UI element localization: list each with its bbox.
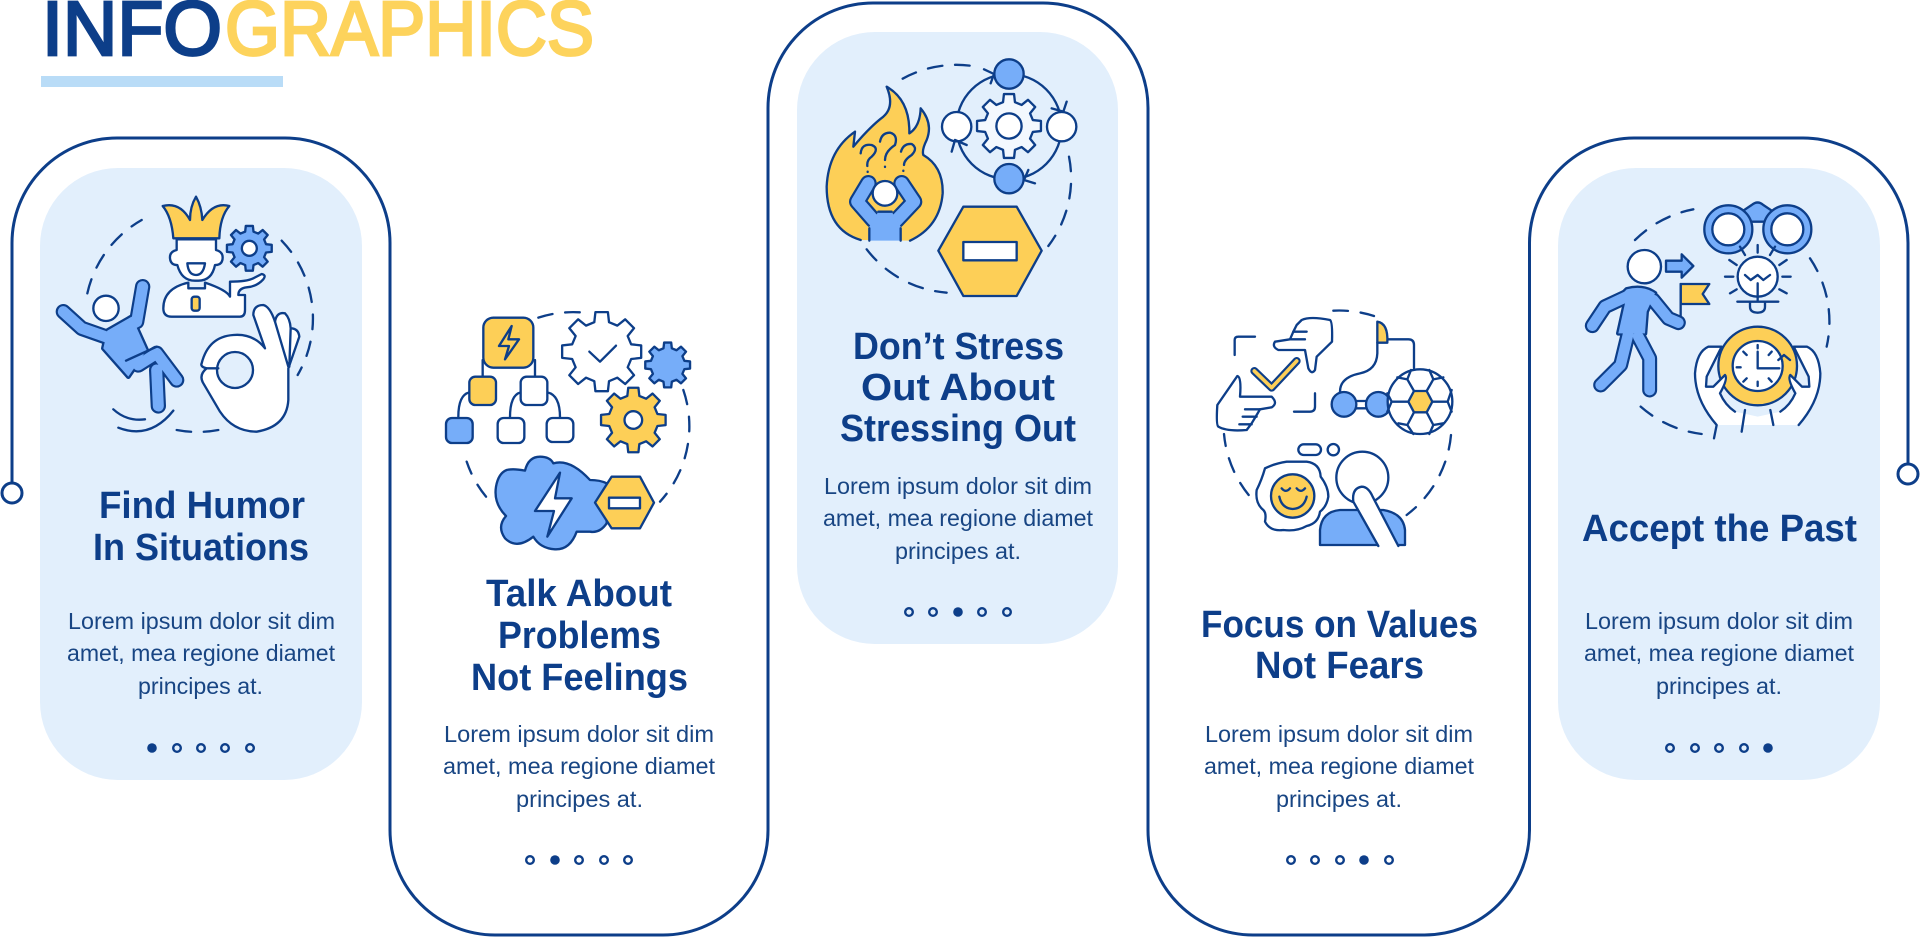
- panel 1 text: find humor: amet, mea regione diamet: [67, 640, 336, 666]
- panel 5 text: accept the past: principes at.: [1656, 673, 1782, 699]
- panel 5 text: accept the past: amet, mea regione diamet: [1584, 640, 1855, 666]
- panel 4 text: focus on values: Lorem ipsum dolor sit dim: [1205, 721, 1473, 747]
- panel 3 text: don't stress: amet, mea regione diamet: [823, 505, 1094, 531]
- panel 5 text: accept the past: Accept the Past: [1582, 508, 1857, 550]
- pager 1: [147, 743, 254, 753]
- panel 4 text: focus on values: amet, mea regione diamet: [1204, 753, 1475, 779]
- panel 5 text: accept the past: [1582, 508, 1857, 699]
- panel 3 text: don't stress: Out About: [861, 367, 1055, 409]
- panel 2 text: talk about problems: Not Feelings: [471, 657, 688, 699]
- panel 1 text: find humor: In Situations: [93, 527, 309, 569]
- title: [42, 0, 594, 72]
- panel 2 text: talk about problems: amet, mea regione diamet: [443, 753, 716, 779]
- pager 2: [526, 855, 632, 865]
- panel 3 text: don't stress: Lorem ipsum dolor sit dim: [824, 473, 1092, 499]
- panel 1 text: find humor: principes at.: [138, 673, 263, 699]
- title underline: [41, 76, 283, 87]
- pager 5: [1666, 743, 1773, 753]
- icon: stress: [827, 59, 1076, 296]
- panel 4 text: focus on values: [1201, 604, 1478, 812]
- panel 3 text: don't stress: principes at.: [895, 538, 1021, 564]
- pager 4: [1287, 855, 1393, 865]
- icon: past: [1592, 202, 1829, 438]
- panel 3 text: don't stress: [823, 326, 1094, 564]
- panel 4 text: focus on values: Focus on Values: [1201, 604, 1478, 646]
- icon: values: [1217, 311, 1452, 547]
- panel 2 text: talk about problems: Problems: [498, 615, 661, 657]
- panel 3 text: don't stress: Don’t Stress: [853, 326, 1064, 368]
- panel 4 text: focus on values: Not Fears: [1255, 645, 1424, 687]
- panel 1 text: find humor: Find Humor: [99, 485, 305, 527]
- panel 1 text: find humor: [67, 485, 336, 699]
- icon: humor: [63, 197, 313, 432]
- pager 3: [905, 607, 1011, 617]
- panel 2 text: talk about problems: Lorem ipsum dolor sit dim: [444, 721, 714, 747]
- panel 2 text: talk about problems: principes at.: [516, 786, 643, 812]
- icon: problems: [446, 312, 690, 549]
- panel 5 text: accept the past: Lorem ipsum dolor sit dim: [1585, 608, 1853, 634]
- panel 2 text: talk about problems: [443, 573, 716, 812]
- panel 2 text: talk about problems: Talk About: [486, 573, 672, 615]
- panel 1 text: find humor: Lorem ipsum dolor sit dim: [68, 608, 335, 634]
- panel: background cards: [40, 32, 1880, 780]
- panel 4 text: focus on values: principes at.: [1276, 786, 1402, 812]
- panel 3 text: don't stress: Stressing Out: [840, 408, 1076, 450]
